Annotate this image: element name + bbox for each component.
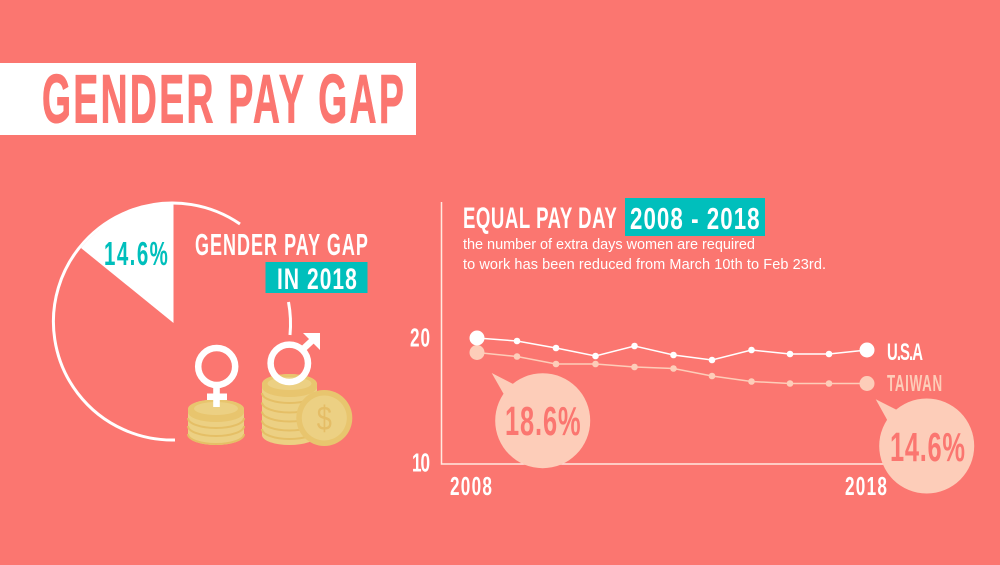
legend labels: TAIWAN [887,370,942,396]
chart heading: 2008 - 2018 [630,201,760,236]
icon: dollar coin: $ [317,399,332,438]
line series: Taiwan [470,345,874,391]
axis labels: 2008 [450,471,492,501]
legend labels [887,340,942,396]
icon: male symbol [271,333,320,382]
axis labels: 10 [412,448,430,477]
icon: dollar coin [296,390,352,446]
axis labels: 20 [410,323,430,352]
chart description: the number of extra days women are required [463,237,755,253]
title banner: GENDER PAY GAP [42,60,404,137]
pie chart: 14.6% gender pay gap: 14.6% [104,235,168,272]
chart heading [463,198,765,236]
icon: female symbol [198,348,235,407]
pie heading [195,228,368,296]
pie heading: IN 2018 [277,264,357,296]
callout: 18.6% [492,373,590,468]
icon: tall coin stack [262,374,317,445]
axis labels: 2018 [845,471,887,501]
pie chart: 14.6% gender pay gap [53,203,291,440]
chart axes [442,202,885,464]
chart description [463,237,826,273]
chart heading: EQUAL PAY DAY [463,202,617,235]
pie heading: GENDER PAY GAP [195,228,368,262]
callout: 14.6% [876,398,974,494]
chart description: to work has been reduced from March 10th to Feb 23rd. [463,257,826,273]
legend labels: U.S.A [887,340,923,366]
axis labels [410,323,887,501]
callout: 18.6%: 18.6% [505,399,581,445]
callout: 14.6%: 14.6% [890,425,965,471]
line series: U.S.A [470,330,874,363]
icon: small coin stack [188,400,244,445]
